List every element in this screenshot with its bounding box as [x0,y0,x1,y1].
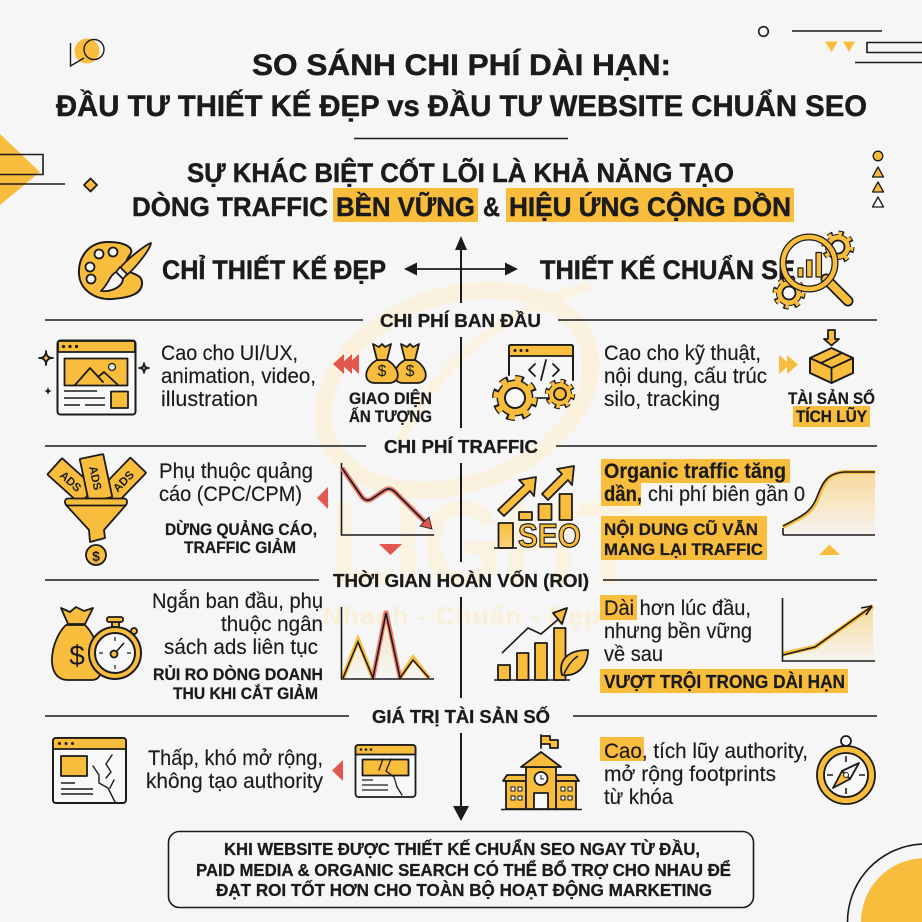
callout: conclusion box: ĐẠT ROI TỐT HƠN CHO TOÀN BỘ HOẠT ĐỘNG MARKETING [216,879,712,900]
subtitle with highlights: SỰ KHÁC BIỆT CỐT LÕI LÀ KHẢ NĂNG TẠO [187,156,734,188]
label: old content still brings traffic: NỘI DUNG CŨ VẪN [604,519,758,539]
icon: two money bags: $ [378,363,387,380]
icon: compass [817,736,875,804]
label: superior in the long term: VƯỢT TRỘI TRONG DÀI HẠN [604,671,845,692]
icon: ads funnel: ADS [86,465,103,492]
text: longer but sustainable [600,595,752,666]
subtitle with highlights: & [483,192,500,222]
decoration: right shapes [872,151,884,207]
section divider: payback period: THỜI GIAN HOÀN VỐN (ROI) [333,570,589,591]
icon: two money bags: $ [406,363,415,380]
label: old content still brings traffic [601,516,767,560]
icon: ads funnel: ADS [57,470,83,495]
text: initial cost left: Cao cho UI/UX, [161,342,298,365]
text: high value: Cao, tích lũy authority, [604,740,808,763]
icon: SEO growth: SEO [518,517,581,554]
chart: spiky ads revenue [342,607,434,679]
text: payback left: Ngắn ban đầu, phụ [152,590,323,613]
text: payback left [152,590,323,659]
label: accumulated digital asset: TÍCH LŨY [796,406,867,426]
label: impressive interface: GIAO DIỆN [349,389,432,408]
section divider: traffic cost: CHI PHÍ TRAFFIC [384,436,538,457]
watermark logo [295,254,640,631]
icon: SEO growth [494,466,581,554]
title: SO SÁNH CHI PHÍ DÀI HẠN: [252,48,671,82]
chart: organic growth curve [783,472,875,535]
text: organic traffic grows: chi phí biên gần 0 [648,483,805,506]
decoration: left shapes [0,134,97,205]
text: initial cost right: Cao cho kỹ thuật, [604,342,761,365]
text: organic traffic grows: dần, [604,483,642,506]
subtitle with highlights: HIỆU ỨNG CỘNG DỒN [509,191,791,222]
subtitle with highlights [132,156,794,222]
watermark logo: Nhanh - Chuẩn - Đẹp [323,601,600,631]
title [56,48,867,123]
text: traffic cost left: cáo (CPC/CPM) [159,483,302,506]
icon: red triangle down [379,544,402,555]
text: longer but sustainable: nhưng bền vững [604,620,752,643]
label: accumulated digital asset: TÀI SẢN SỐ [788,388,875,408]
icon: palette and brush [79,242,151,299]
icon: ads funnel: $ [92,548,100,564]
text: organic traffic grows: Organic traffic tăng [604,460,786,483]
text: initial cost right: silo, tracking [604,388,720,411]
label: accumulated digital asset [788,388,875,427]
text: low value [146,747,323,793]
text: longer but sustainable: Dài hơn lúc đầu, [604,597,751,620]
callout: conclusion box [168,832,754,908]
text: payback left: sách ads liên tục [164,636,318,659]
text: low value: không tạo authority [146,770,323,793]
callout: conclusion box: PAID MEDIA & ORGANIC SEARCH CÓ THỂ BỔ TRỢ CHO NHAU ĐỂ [196,859,731,880]
icon: cracked browser small [356,745,416,797]
section divider: digital asset value: GIÁ TRỊ TÀI SẢN SỐ [372,706,550,727]
icon: money bag and stopwatch: $ [69,640,85,671]
icon: red triple arrows [333,354,359,374]
text: payback left: thuộc ngân [221,613,323,636]
horizontal double arrow [404,262,518,276]
heading: SEO standard: THIẾT KẾ CHUẨN SE [540,255,795,285]
icon: bars with arrow and leaf [494,608,588,680]
icon: school building with flag [501,735,582,810]
decoration: bottom right circle [848,844,922,922]
text: traffic cost left [159,460,313,506]
text: low value: Thấp, khó mở rộng, [148,747,323,770]
icon: yellow double arrows [779,355,798,374]
text: longer but sustainable: về sau [604,643,663,666]
text: initial cost left: animation, video, [161,365,316,388]
decoration: top left icon [70,38,104,66]
text: organic traffic grows [601,459,805,506]
callout: conclusion box: KHI WEBSITE ĐƯỢC THIẾT KẾ CHUẨN SEO NGAY TỪ ĐẦU, [224,838,700,859]
subtitle with highlights: DÒNG TRAFFIC [132,191,328,222]
label: revenue risk when cut: THU KHI CẮT GIẢM [173,684,318,703]
icon: box with down arrow [810,330,853,383]
icon: money bag and stopwatch [52,607,141,680]
text: initial cost left [161,342,316,411]
icon: two money bags [366,344,426,383]
subtitle with highlights: BỀN VỮNG [336,191,475,222]
watermark logo: LIGHT [330,477,640,611]
label: stop ads, traffic drops: DỪNG QUẢNG CÁO, [165,520,317,539]
icon: red triangle left [332,760,343,781]
label: stop ads, traffic drops [165,520,317,557]
section divider: initial cost: CHI PHÍ BAN ĐẦU [380,310,541,331]
text: high value: mở rộng footprints [604,763,776,786]
text: initial cost right [604,342,767,411]
text: traffic cost left: Phụ thuộc quảng [159,460,313,483]
icon: browser with image and sparkles [39,340,149,414]
heading: design only: CHỈ THIẾT KẾ ĐẸP [162,255,386,285]
label: revenue risk when cut [153,665,323,703]
icon: red triangle left [317,487,328,509]
icon: ads funnel [47,454,146,565]
label: old content still brings traffic: MANG LẠI TRAFFIC [604,541,763,559]
title: ĐẦU TƯ THIẾT KẾ ĐẸP vs ĐẦU TƯ WEBSITE CHUẨN SEO [56,89,867,123]
center vertical axis arrow [453,236,469,821]
text: initial cost right: nội dung, cấu trúc [604,365,767,388]
icon: code window with gears [496,345,573,416]
text: initial cost left: illustration [161,388,258,411]
icon: cracked browser large [53,738,126,803]
text: high value [600,737,808,809]
icon: magnifier with gears [776,234,851,306]
chart: falling traffic [342,463,434,535]
text: high value: từ khóa [604,786,673,809]
chart: long term growth [782,598,875,661]
label: impressive interface [349,389,432,426]
label: stop ads, traffic drops: TRAFFIC GIẢM [184,538,296,557]
icon: yellow triangle up [819,544,840,555]
decoration: top right shapes [759,27,922,62]
label: revenue risk when cut: RỦI RO DÒNG DOANH [153,665,323,684]
label: impressive interface: ẤN TƯỢNG [349,407,432,426]
icon: ads funnel: ADS [111,469,137,495]
